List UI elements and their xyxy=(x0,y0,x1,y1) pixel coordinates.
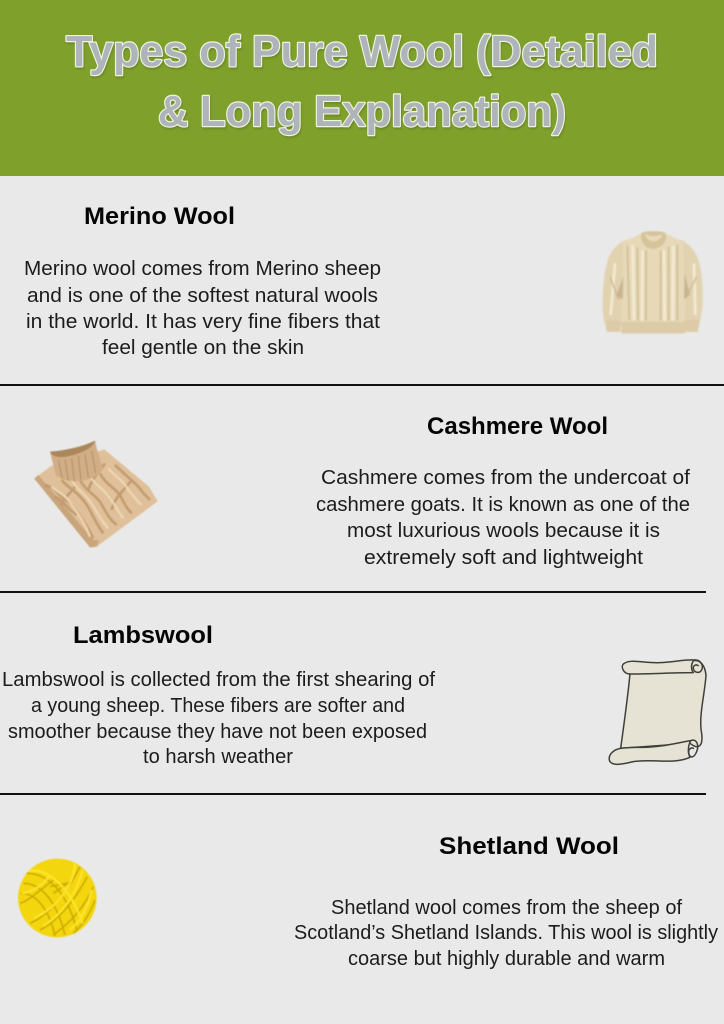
divider xyxy=(0,384,724,386)
text block: Merino description xyxy=(24,258,381,359)
icon: folded cable-knit turtleneck xyxy=(34,441,158,547)
text block: Merino description: Merino wool comes from Merino sheep xyxy=(24,258,381,280)
text block: Cashmere description: Cashmere comes from the undercoat of xyxy=(321,467,690,489)
text block: Cashmere description: cashmere goats. It is known as one of the xyxy=(316,494,690,516)
text block: Lambswool description: a young sheep. These fibers are softer and xyxy=(31,695,405,717)
heading: Cashmere Wool: Cashmere Wool xyxy=(427,413,608,440)
text block: Shetland description: Shetland wool comes from the sheep of xyxy=(331,897,682,919)
text block: Shetland description: coarse but highly durable and warm xyxy=(348,948,665,970)
divider xyxy=(0,793,706,795)
heading: Lambswool: Lambswool xyxy=(73,622,213,649)
icon: yellow yarn ball xyxy=(18,859,97,937)
title xyxy=(66,27,659,138)
text block: Lambswool description: Lambswool is collected from the first shearing of xyxy=(2,669,435,691)
text block: Cashmere description xyxy=(316,467,690,569)
text block: Lambswool description xyxy=(2,669,435,768)
title: & Long Explanation) xyxy=(158,87,566,136)
text block: Lambswool description: smoother because they have not been exposed xyxy=(8,721,427,743)
icon: parchment scroll xyxy=(609,660,706,764)
text block: Cashmere description: extremely soft and lightweight xyxy=(364,547,643,569)
icon: cream sweater xyxy=(603,231,703,333)
text block: Cashmere description: most luxurious wools because it is xyxy=(347,520,660,542)
panel: Cashmere Wool xyxy=(34,413,690,569)
heading: Shetland Wool: Shetland Wool xyxy=(439,833,619,860)
header banner xyxy=(0,0,724,176)
text block: Lambswool description: to harsh weather xyxy=(143,746,293,768)
divider xyxy=(0,591,706,593)
panel: Merino Wool xyxy=(24,203,703,359)
panel: Shetland Wool xyxy=(18,833,718,970)
text block: Merino description: feel gentle on the skin xyxy=(102,337,304,359)
title: Types of Pure Wool (Detailed xyxy=(67,29,659,78)
text block: Shetland description: Scotland’s Shetland Islands. This wool is slightly xyxy=(294,922,718,944)
panel: Lambswool xyxy=(2,622,706,768)
text block: Shetland description xyxy=(294,897,718,970)
title: & Long Explanation) xyxy=(159,89,567,138)
title: Types of Pure Wool (Detailed xyxy=(66,27,658,76)
heading: Merino Wool: Merino Wool xyxy=(84,203,235,230)
text block: Merino description: in the world. It has very fine fibers that xyxy=(26,311,380,333)
text block: Merino description: and is one of the softest natural wools xyxy=(27,285,378,307)
